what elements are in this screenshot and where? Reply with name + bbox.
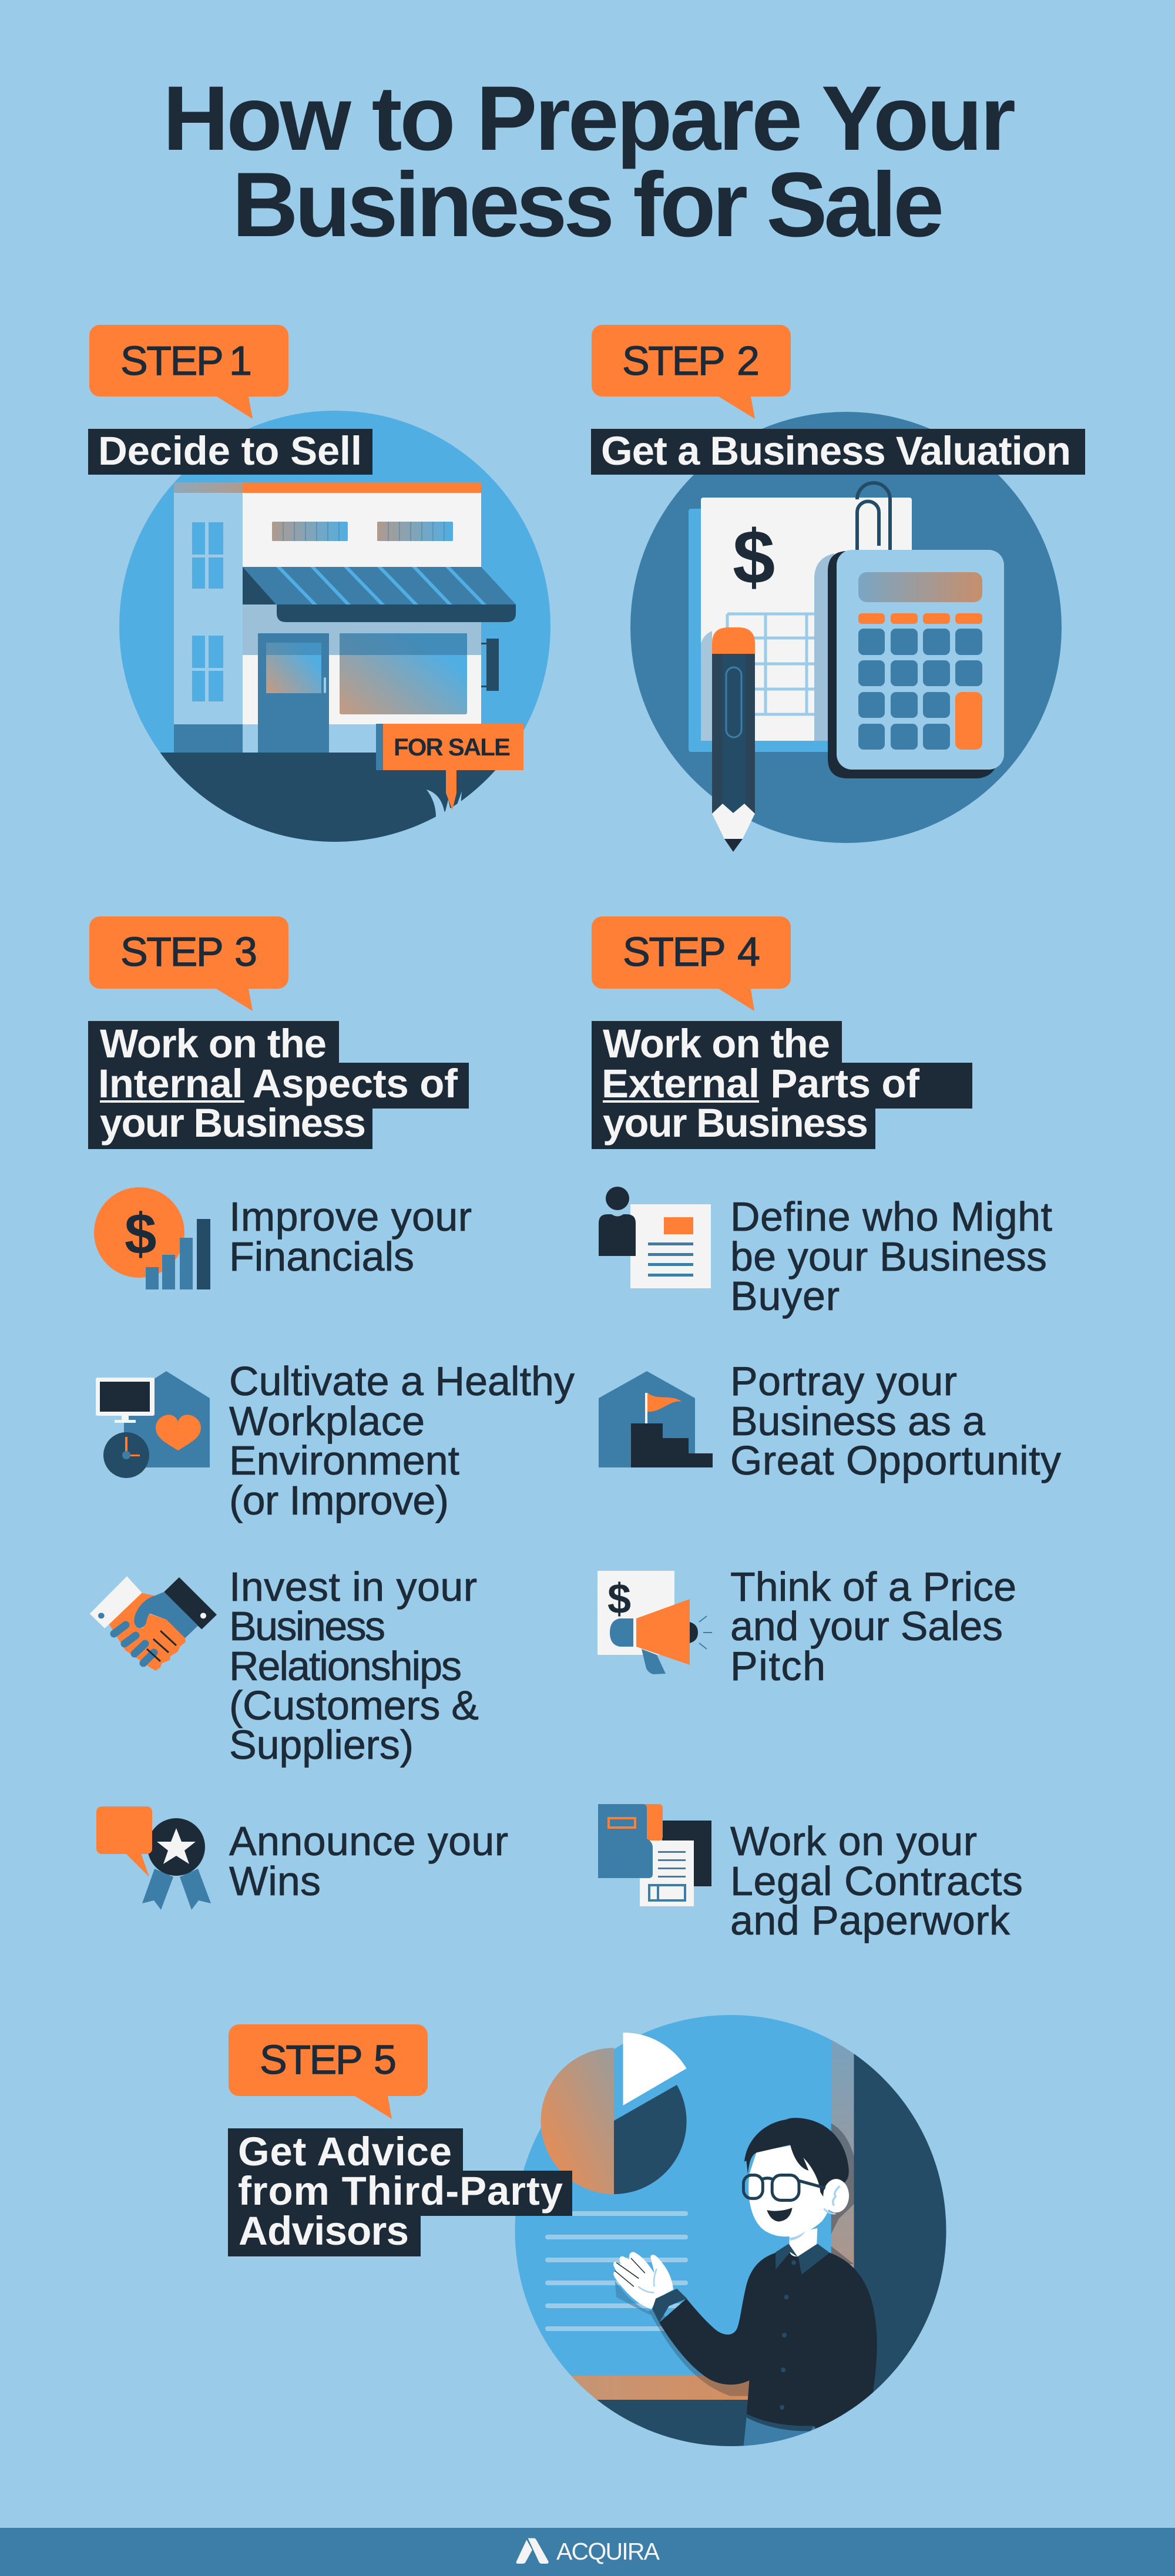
step 4 heading: Work on the bbox=[603, 1021, 830, 1066]
text: price and sales pitch bbox=[730, 1564, 1016, 1689]
title bbox=[163, 68, 1016, 256]
step 5 bubble: 5 bbox=[374, 2037, 395, 2083]
illustration: storefront for sale bbox=[119, 411, 550, 842]
step 3 heading: your Business bbox=[100, 1100, 366, 1146]
pencil bbox=[712, 627, 755, 852]
text: improve financials: Financials bbox=[229, 1234, 414, 1279]
for sale sign: FOR SALE bbox=[394, 733, 511, 761]
step 3 heading: Internal Aspects of bbox=[98, 1061, 458, 1106]
text: legal contracts: and Paperwork bbox=[730, 1897, 1010, 1943]
text: healthy workplace: Environment bbox=[229, 1438, 459, 1483]
step 3 heading: Work on the bbox=[100, 1021, 327, 1066]
paperclip bbox=[857, 483, 890, 550]
step 3 bubble bbox=[89, 916, 288, 1011]
footer bar bbox=[0, 2528, 1175, 2576]
text: business relationships: Suppliers) bbox=[229, 1722, 414, 1768]
text: define buyer: Define who Might bbox=[730, 1194, 1052, 1240]
text: healthy workplace bbox=[229, 1358, 575, 1523]
step 2 bubble bbox=[592, 325, 791, 419]
text: legal contracts: Legal Contracts bbox=[730, 1858, 1023, 1904]
text: announce wins bbox=[229, 1818, 508, 1904]
step 3 heading bbox=[88, 1021, 469, 1149]
icon: opportunity house and flag bbox=[599, 1371, 713, 1467]
step 2 heading: Get a Business Valuation bbox=[601, 428, 1071, 473]
step 4 heading: your Business bbox=[603, 1100, 868, 1146]
icon: workplace monitor, clock, heart bbox=[96, 1371, 210, 1478]
step 4 heading bbox=[592, 1021, 972, 1149]
step 4 bubble: 4 bbox=[737, 929, 759, 975]
logo mark bbox=[516, 2538, 549, 2564]
logo text: ACQUIRA bbox=[556, 2538, 660, 2565]
step 3 bubble: 3 bbox=[234, 929, 256, 975]
text: announce wins: Wins bbox=[229, 1858, 321, 1904]
illustration: valuation calculator: $ bbox=[733, 514, 775, 600]
text: define buyer: Buyer bbox=[730, 1273, 840, 1319]
text: healthy workplace: Workplace bbox=[229, 1398, 425, 1444]
step 2 bubble: STEP bbox=[622, 338, 723, 384]
calculator bbox=[828, 550, 1004, 778]
text: great opportunity bbox=[730, 1358, 1061, 1483]
icon: buyer profile bbox=[599, 1187, 711, 1288]
text: great opportunity: Great Opportunity bbox=[730, 1438, 1061, 1483]
step 1 bubble: 1 bbox=[229, 338, 251, 384]
step 5 heading: Advisors bbox=[239, 2208, 409, 2253]
step 1 bubble bbox=[89, 325, 288, 419]
text: great opportunity: Portray your bbox=[730, 1358, 957, 1404]
illustration: advisor presenting bbox=[515, 2015, 946, 2446]
text: define buyer: be your Business bbox=[730, 1234, 1047, 1279]
text: legal contracts: Work on your bbox=[730, 1818, 977, 1864]
illustration: valuation calculator bbox=[630, 412, 1062, 852]
step 4 heading: External Parts of bbox=[602, 1061, 920, 1106]
text: legal contracts bbox=[730, 1818, 1023, 1943]
icon: price and megaphone bbox=[597, 1571, 712, 1674]
step 5 heading: from Third-Party bbox=[238, 2168, 563, 2214]
text: business relationships bbox=[229, 1564, 479, 1768]
icon: speech bubble and award bbox=[96, 1806, 211, 1910]
text: business relationships: Business bbox=[229, 1603, 385, 1649]
step 1 bubble: STEP bbox=[120, 338, 221, 384]
title: How to Prepare Your bbox=[163, 68, 1016, 170]
icon: dollar and bar chart: $ bbox=[125, 1201, 157, 1266]
text: price and sales pitch: and your Sales bbox=[730, 1603, 1003, 1649]
text: improve financials bbox=[229, 1194, 472, 1279]
text: improve financials: Improve your bbox=[229, 1194, 472, 1240]
person bbox=[613, 2118, 891, 2456]
icon: legal folder and paperwork bbox=[598, 1804, 711, 1906]
text: announce wins: Announce your bbox=[229, 1818, 508, 1864]
table bbox=[727, 614, 828, 716]
text: healthy workplace: Cultivate a Healthy bbox=[229, 1358, 575, 1404]
text: business relationships: (Customers & bbox=[229, 1682, 479, 1728]
text: price and sales pitch: Think of a Price bbox=[730, 1564, 1016, 1610]
icon: handshake bbox=[90, 1576, 217, 1671]
step 4 bubble bbox=[592, 916, 791, 1011]
text: business relationships: Invest in your bbox=[229, 1564, 477, 1610]
step 5 bubble bbox=[229, 2024, 428, 2119]
icon: price and megaphone: $ bbox=[607, 1576, 631, 1623]
step 1 heading: Decide to Sell bbox=[98, 428, 362, 473]
icon: dollar and bar chart bbox=[94, 1187, 210, 1289]
text: price and sales pitch: Pitch bbox=[730, 1643, 825, 1689]
text: healthy workplace: (or Improve) bbox=[229, 1477, 449, 1523]
text lines on board bbox=[545, 2211, 688, 2331]
step 4 bubble: STEP bbox=[623, 929, 724, 975]
for sale sign bbox=[376, 724, 523, 810]
text: business relationships: Relationships bbox=[229, 1643, 462, 1689]
step 3 bubble: STEP bbox=[120, 929, 221, 975]
step 5 bubble: STEP bbox=[260, 2037, 361, 2083]
text: great opportunity: Business as a bbox=[730, 1398, 985, 1444]
icon: grass bbox=[427, 790, 477, 822]
step 5 heading: Get Advice bbox=[238, 2129, 452, 2174]
step 5 heading bbox=[228, 2128, 572, 2256]
text: define buyer bbox=[730, 1194, 1052, 1319]
step 2 bubble: 2 bbox=[737, 338, 758, 384]
title: Business for Sale bbox=[232, 154, 944, 256]
pie chart bbox=[540, 2033, 687, 2194]
